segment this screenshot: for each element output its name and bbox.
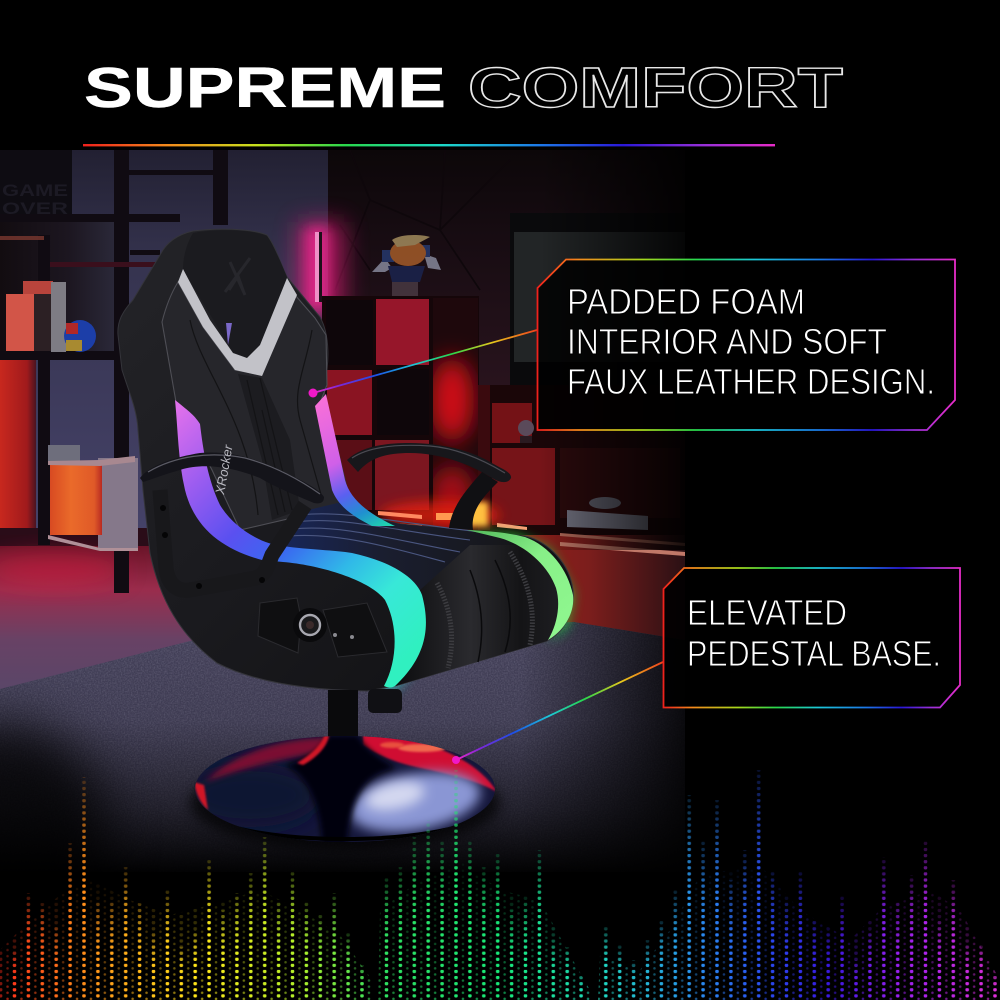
speaker control panel [258,598,387,657]
faceted wall lines [342,223,480,290]
blue white highlight [345,763,485,841]
white V stripe [178,269,297,376]
title word SUPREME: SUPREME [84,56,446,120]
seat top stripes [283,500,525,590]
near arm frame [160,490,305,590]
far green LED strip [467,530,573,640]
chair body silhouette [118,229,573,691]
red lit lower-left wall [0,360,36,532]
base shadow [190,757,500,849]
centre chest panel [238,374,300,520]
seat front [395,545,563,686]
callout text [567,281,935,402]
orange hot spots [398,744,446,752]
back wall left [36,150,328,528]
base disc [195,736,495,842]
back grooves [190,320,322,515]
LED floor strips [378,501,685,556]
callout text: PEDESTAL BASE. [687,633,941,674]
seat seams [437,552,532,668]
callout text: FAUX LEATHER DESIGN. [567,361,935,402]
connector line 2 [452,662,663,764]
carpet vignette [0,622,685,872]
chair glow [175,400,573,690]
pink LED lamp [298,222,344,317]
left red edge [194,782,208,810]
purple window [226,323,232,345]
carpet [0,622,685,872]
pedestal base [180,733,500,849]
figurine [372,235,441,296]
dark left sheen [205,764,310,829]
right media unit [478,385,685,535]
room photo scene [0,150,685,940]
game over poster: OVER [2,199,68,218]
left LED strip [175,400,426,688]
far arm rest [347,443,511,530]
webcam [518,420,534,443]
left shelf frame [0,150,228,593]
LED strip on shelf [0,236,44,240]
callout text: PADDED FOAM [567,281,805,322]
callout text: ELEVATED [687,592,847,633]
right floor [520,535,685,636]
upper shelf shadow [0,218,114,353]
left floor [0,546,200,690]
callout: pedestal base [664,568,960,708]
connector line 1 [308,330,537,398]
title rainbow rule [83,144,775,146]
socket and orange box [48,445,138,551]
callout: padded foam [538,260,955,430]
callout text [687,592,941,674]
books [6,281,66,352]
TV [510,213,658,385]
title word COMFORT: COMFORT [468,56,843,120]
carpet texture [0,622,645,824]
title [84,56,843,120]
game over poster [0,150,72,218]
left cone red streak [297,733,329,765]
head pad [183,230,287,358]
black central cone [285,735,395,845]
near arm rest [140,453,324,503]
pedestal post [328,689,402,738]
equalizer dots [0,760,1000,1000]
Xrocker brand: XRocker [212,443,236,497]
back carbon panel [162,282,348,530]
arm bolts [160,505,265,589]
dim red left top reflection [205,738,328,782]
red floor glow [0,554,125,586]
callout text: INTERIOR AND SOFT [567,321,887,362]
X logo [225,258,250,295]
game over poster: GAME [2,181,68,200]
bottom rim [240,826,452,841]
games console [567,497,648,530]
red right top reflection [363,734,497,792]
dark baseboard [0,528,149,546]
right LED strip [315,394,395,526]
gaming chair [118,229,573,738]
centre cabinet [322,296,479,536]
back wall right [328,150,642,385]
right edge fade [540,150,685,550]
mug [64,320,96,352]
